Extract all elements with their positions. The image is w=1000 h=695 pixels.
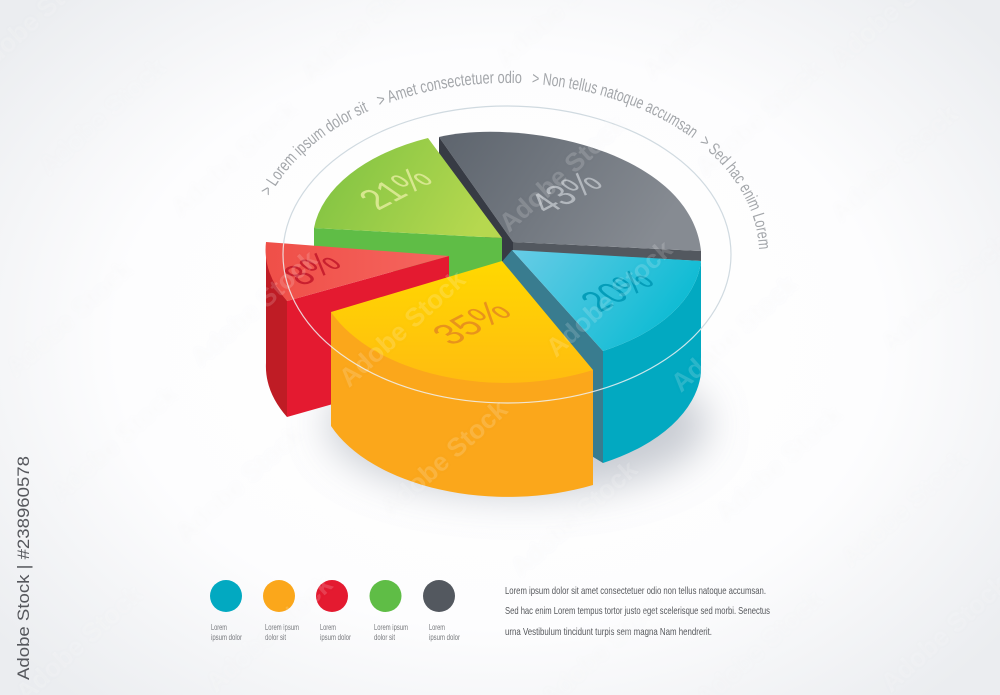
- legend item blue: ipsum dolor: [211, 632, 242, 642]
- watermarks: Adobe Stock: [375, 394, 513, 523]
- legend item orange: Lorem ipsum: [265, 622, 299, 632]
- watermarks: Adobe Stock: [170, 419, 308, 548]
- label 43%: 43%: [519, 165, 612, 220]
- legend item orange: dolor sit: [265, 632, 286, 642]
- text: > Amet consectetuer odio: [376, 70, 522, 105]
- legend item green: [370, 580, 408, 642]
- description paragraph: [505, 585, 770, 638]
- legend item red: ipsum dolor: [320, 632, 351, 642]
- orbit ring: [283, 106, 731, 403]
- watermarks: Adobe Stock: [710, 399, 848, 528]
- label 21%: 21%: [349, 161, 442, 216]
- text: > Non tellus natoque accumsan: [532, 73, 697, 138]
- watermarks: Adobe Stock: [505, 454, 643, 583]
- watermarks: Adobe Stock: [333, 264, 471, 393]
- pie drop shadow: [328, 355, 708, 495]
- legend item gray: ipsum dolor: [429, 632, 460, 642]
- legend item gray: [423, 580, 460, 642]
- label 35%: 35%: [422, 293, 521, 351]
- legend: [210, 580, 460, 642]
- text: > Sed hac enim Lorem: [700, 136, 768, 249]
- legend item green: dolor sit: [374, 632, 395, 642]
- slice: green 21%: [314, 138, 502, 280]
- slice: blue 20%: [500, 250, 701, 463]
- legend item green: Lorem ipsum: [374, 622, 408, 632]
- watermarks: Adobe Stock: [33, 52, 171, 181]
- label 8%: 8%: [274, 245, 351, 292]
- legend item red: [316, 580, 351, 642]
- watermarks: Adobe Stock: [165, 94, 303, 223]
- pie chart: [266, 132, 701, 497]
- label 20%: 20%: [571, 263, 664, 318]
- slice: gray 43%: [439, 132, 701, 268]
- stock id: Adobe Stock | #238960578: [14, 456, 33, 680]
- watermarks: Adobe Stock: [0, 254, 138, 383]
- slice: red 8%: [266, 242, 449, 417]
- percentage labels: [274, 161, 664, 351]
- description paragraph: urna Vestibulum tincidunt turpis sem magna Nam hendrerit.: [505, 626, 712, 638]
- legend item blue: [210, 580, 242, 642]
- watermarks: Adobe Stock: [493, 109, 631, 238]
- legend item blue: Lorem: [211, 622, 227, 632]
- watermarks: Adobe Stock: [665, 269, 803, 398]
- curved category labels: > Lorem ipsum dolor sit: [262, 102, 368, 196]
- description paragraph: Sed hac enim Lorem tempus tortor justo eget scelerisque sed morbi. Senectus: [505, 605, 770, 617]
- slice: yellow 35%: [331, 261, 593, 497]
- watermarks: Adobe Stock: [835, 444, 973, 573]
- watermarks: Adobe Stock: [185, 244, 323, 373]
- watermarks: Adobe Stock: [45, 379, 183, 508]
- watermarks: Adobe Stock: [825, 99, 963, 228]
- legend item red: Lorem: [320, 622, 336, 632]
- watermarks: Adobe Stock: [540, 234, 678, 363]
- orbit ring front highlight: [282, 243, 701, 404]
- description paragraph: Lorem ipsum dolor sit amet consectetuer odio non tellus natoque accumsan.: [505, 585, 766, 597]
- legend item orange: [263, 580, 299, 642]
- legend item gray: Lorem: [429, 622, 445, 632]
- watermarks: Adobe Stock: [690, 54, 828, 183]
- watermarks: Adobe Stock: [200, 569, 338, 695]
